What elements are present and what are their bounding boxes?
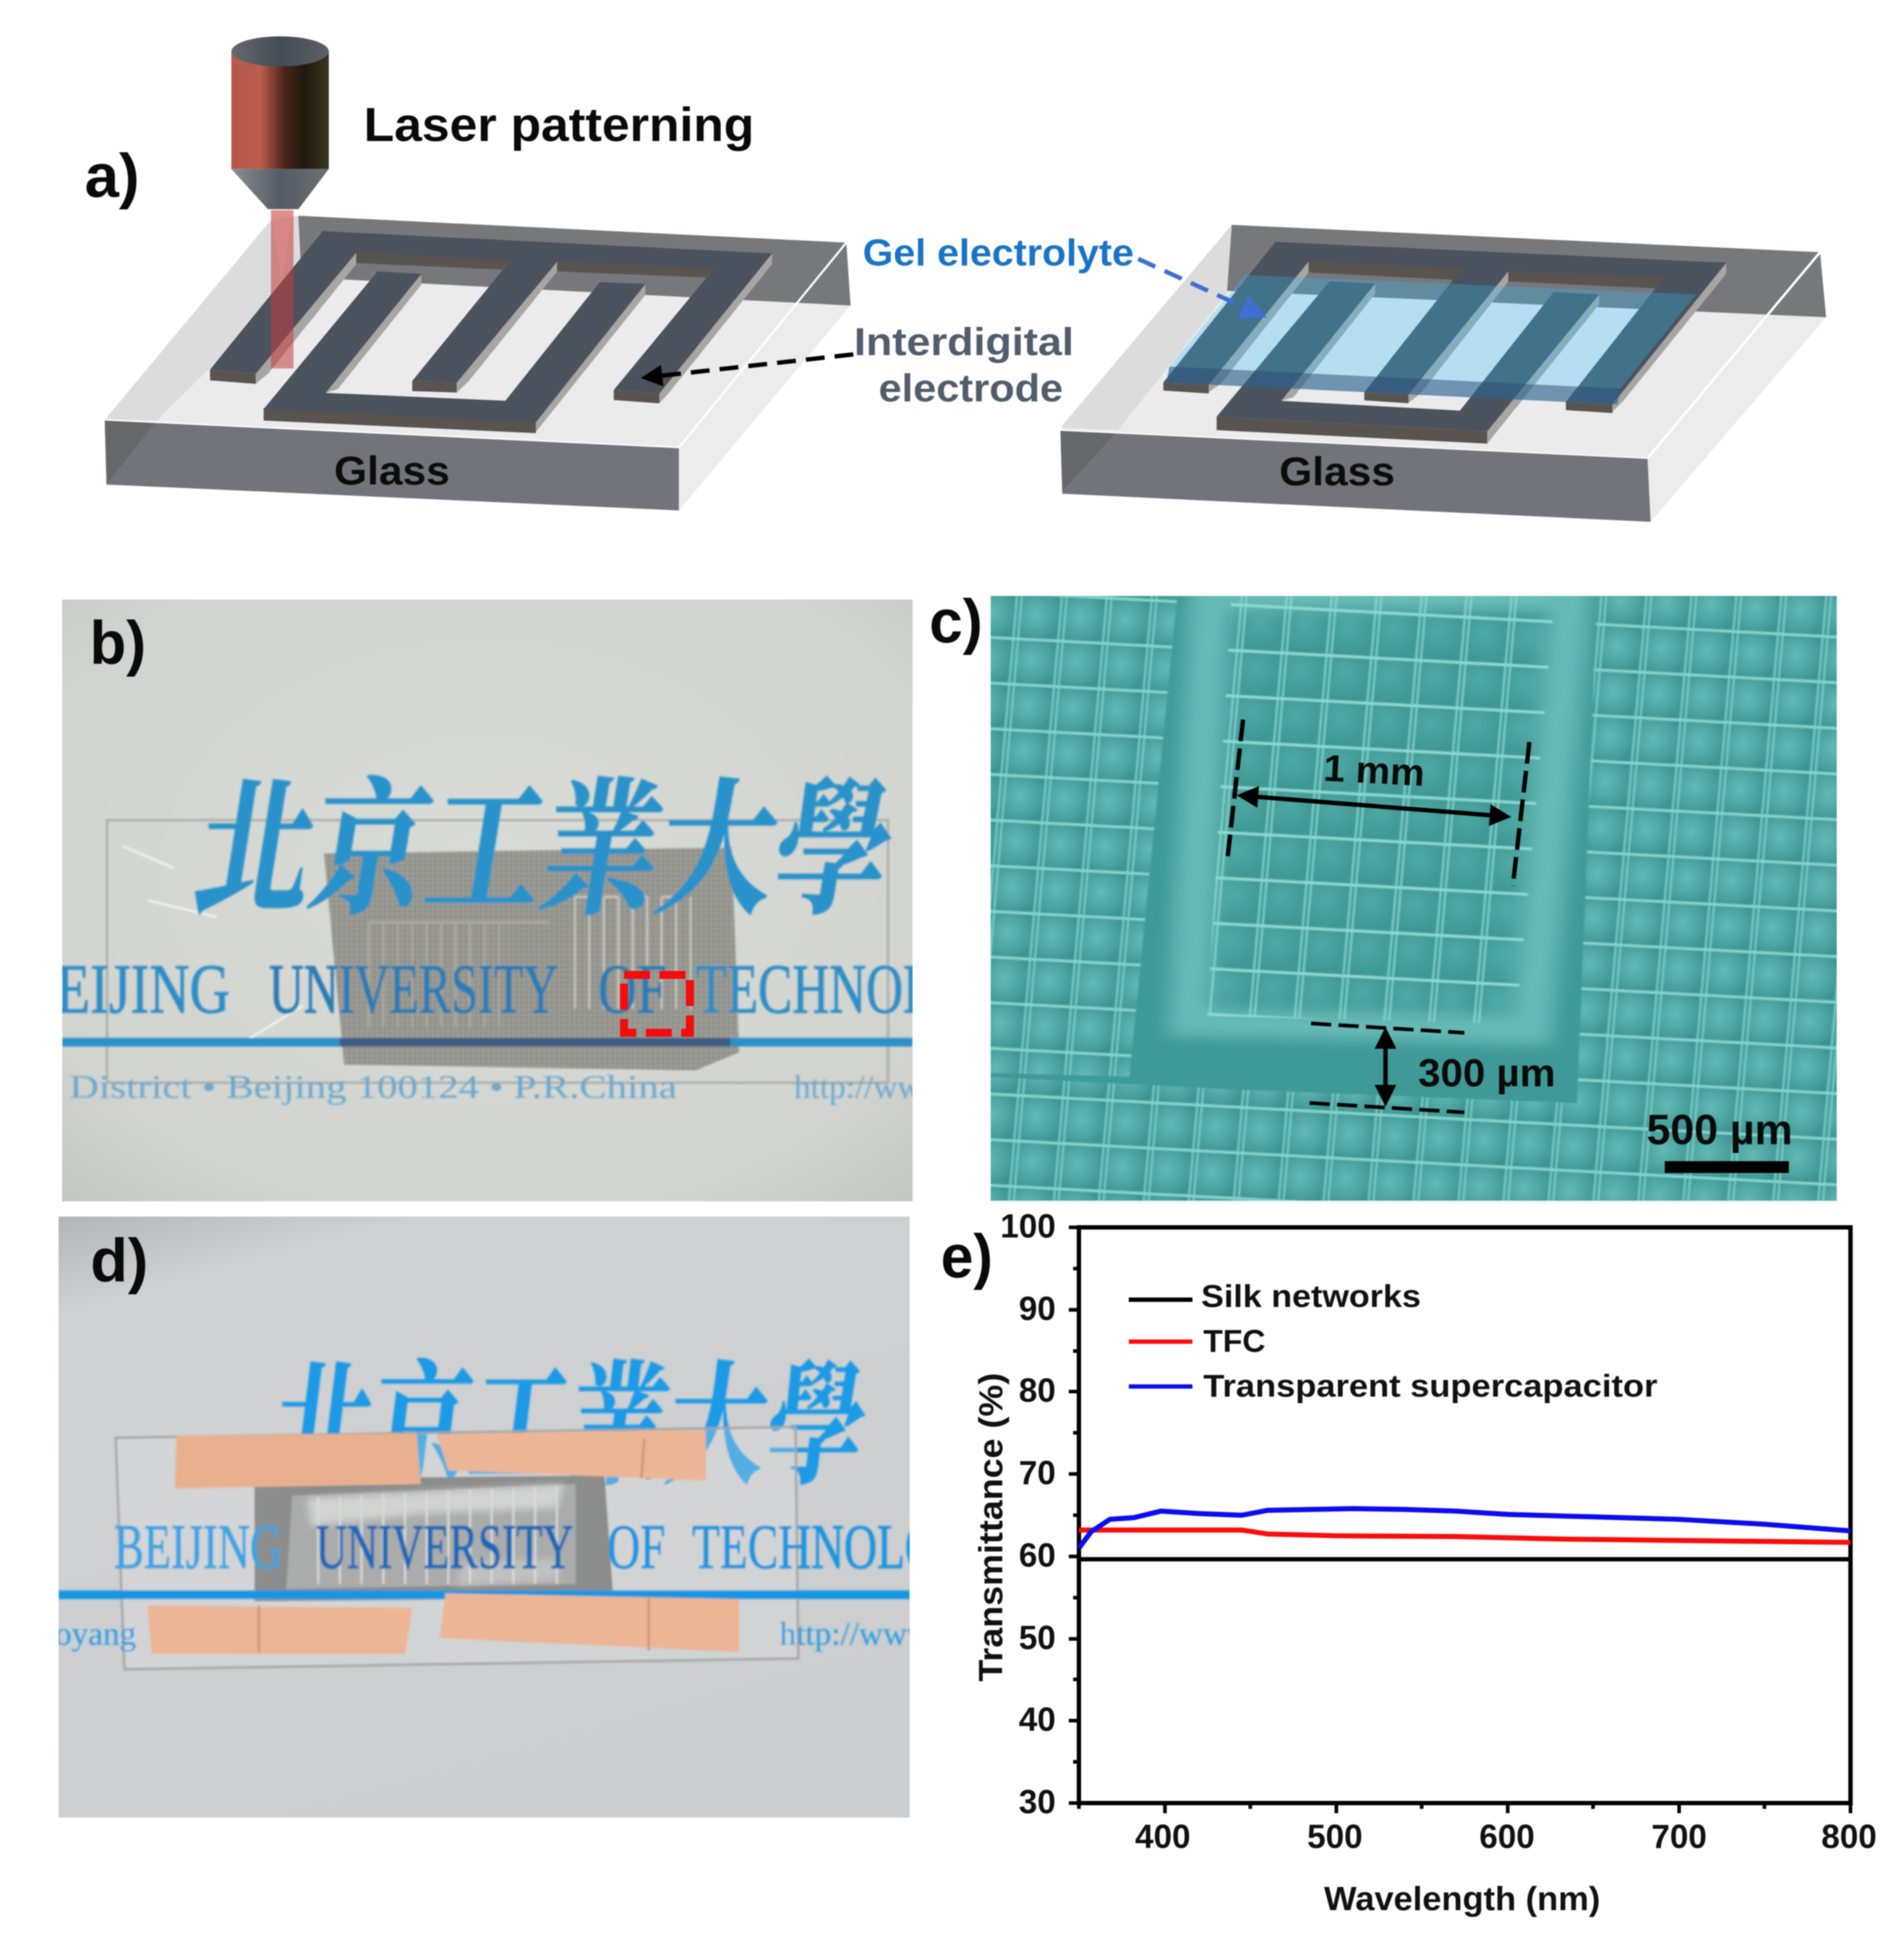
legend [1129, 1279, 1657, 1404]
label: c): c) [929, 587, 983, 655]
scale bar [1665, 1161, 1789, 1173]
mesh center [1208, 596, 1555, 1024]
panel b: photo of device on letterhead [19, 600, 946, 1201]
label: e): e) [941, 1222, 993, 1290]
label: d): d) [90, 1227, 148, 1295]
copper tape top left [175, 1433, 421, 1488]
annotation: 1 mm dimension [1227, 720, 1529, 886]
ticks [1069, 1227, 1850, 1813]
y tick labels: 100 [1000, 1207, 1056, 1245]
glass slide [116, 1427, 798, 1669]
curve: transparent supercapacitor [1079, 1509, 1850, 1548]
Technol word: TECHNOL [696, 950, 934, 1028]
x tick labels: 600 [1480, 1818, 1534, 1855]
electrode lines [318, 1486, 557, 1584]
English letterhead: BEIJING [19, 950, 230, 1028]
TECHNOLOGY clipped: TECHNOLO [692, 1512, 938, 1582]
curve: silk networks [1079, 1557, 1850, 1562]
x tick labels: 400 [1135, 1818, 1190, 1855]
legend: TFC [1203, 1324, 1265, 1359]
slide outline [107, 820, 888, 1083]
mesh regions [986, 596, 1843, 1201]
mesh left [986, 596, 1177, 1077]
gel highlights [307, 1484, 564, 1585]
UNIVERSITY: UNIVERSITY [316, 1512, 573, 1582]
callout: Gel electrolyte: Gel electrolyte [863, 232, 1134, 274]
mesh bottom [986, 1077, 1843, 1201]
gel region [286, 1484, 576, 1589]
mesh right [1573, 596, 1843, 1201]
panel e: transmittance chart [941, 1207, 1877, 1917]
y tick labels [1000, 1207, 1056, 1820]
copper tape top right [437, 1430, 706, 1481]
lower comb electrode left [264, 271, 646, 433]
url: http://www [780, 1615, 931, 1652]
panel d: photo of assembled device [55, 1217, 938, 1818]
curves [1079, 1509, 1850, 1559]
y tick labels: 60 [1019, 1536, 1056, 1574]
y tick labels: 40 [1019, 1700, 1056, 1738]
x tick labels: 800 [1822, 1818, 1877, 1855]
y tick labels: 90 [1019, 1290, 1056, 1327]
label: 300 um: 300 µm [1418, 1052, 1555, 1095]
glass substrate left [105, 36, 850, 511]
x tick labels [1135, 1818, 1877, 1855]
panel a: laser patterning diagram [85, 36, 850, 511]
upper comb electrode left [210, 231, 772, 404]
label: Glass right: Glass [1279, 448, 1395, 494]
label: Glass left: Glass [334, 448, 450, 493]
OF word: OF [598, 950, 667, 1028]
silk network patch [324, 848, 739, 1070]
axes frame [1079, 1227, 1850, 1803]
x tick labels: 500 [1307, 1818, 1362, 1855]
silk patch [255, 1475, 613, 1601]
BEIJING: BEIJING [114, 1512, 282, 1582]
Chinese heading: 北京工業大學 [264, 1355, 875, 1502]
glow around center [1190, 596, 1570, 1030]
url: http://www [794, 1068, 946, 1105]
electrode pattern lines [575, 897, 691, 1009]
panel c: SEM image [986, 596, 1843, 1201]
red dashed box [624, 975, 690, 1033]
label: b): b) [90, 609, 146, 677]
copper tape bottom left [148, 1606, 412, 1654]
callout: Interdigital electrode: electrode [879, 367, 1063, 410]
label: a): a) [85, 142, 140, 210]
University word: UNIVERSITY [269, 950, 558, 1028]
upper comb electrode right [1164, 242, 1726, 413]
x tick labels: 700 [1652, 1818, 1707, 1855]
blue band [59, 1590, 910, 1599]
address line: District • Beijing 100124 • P.R.China [69, 1068, 677, 1105]
laser objective [231, 36, 329, 209]
y tick labels: 30 [1019, 1783, 1056, 1820]
legend: Silk networks [1201, 1279, 1421, 1314]
callout: Interdigital electrode [645, 320, 1074, 410]
gel electrolyte layer [1166, 275, 1696, 404]
callout: Gel electrolyte [863, 232, 1262, 315]
address fragment: oyang [55, 1615, 136, 1652]
OF: OF [607, 1512, 665, 1582]
label: 500 um: 500 µm [1647, 1107, 1793, 1154]
y tick labels: 70 [1019, 1454, 1056, 1491]
x axis title: Wavelength (nm) [1324, 1880, 1600, 1917]
y tick labels: 50 [1019, 1619, 1056, 1656]
laser beam [271, 210, 294, 368]
callout: Interdigital electrode: Interdigital [854, 320, 1074, 364]
copper tape bottom right [440, 1593, 739, 1652]
label: 1 mm: 1 mm [1323, 747, 1426, 795]
curve: TFC [1079, 1530, 1850, 1543]
legend: Transparent supercapacitor [1203, 1368, 1657, 1404]
y axis title: Transmittance (%) [972, 1373, 1009, 1682]
lower comb electrode right [1216, 281, 1599, 443]
Chinese heading: 北京工業大學 [184, 771, 904, 934]
annotation: 300 um dimension [1310, 1023, 1464, 1112]
blue band [62, 1038, 913, 1047]
photo content [19, 771, 946, 1105]
label: Laser patterning: Laser patterning [364, 98, 754, 151]
glass substrate right [1060, 225, 1826, 522]
y tick labels: 80 [1019, 1371, 1056, 1409]
panel a: gel electrolyte diagram [1060, 225, 1826, 522]
